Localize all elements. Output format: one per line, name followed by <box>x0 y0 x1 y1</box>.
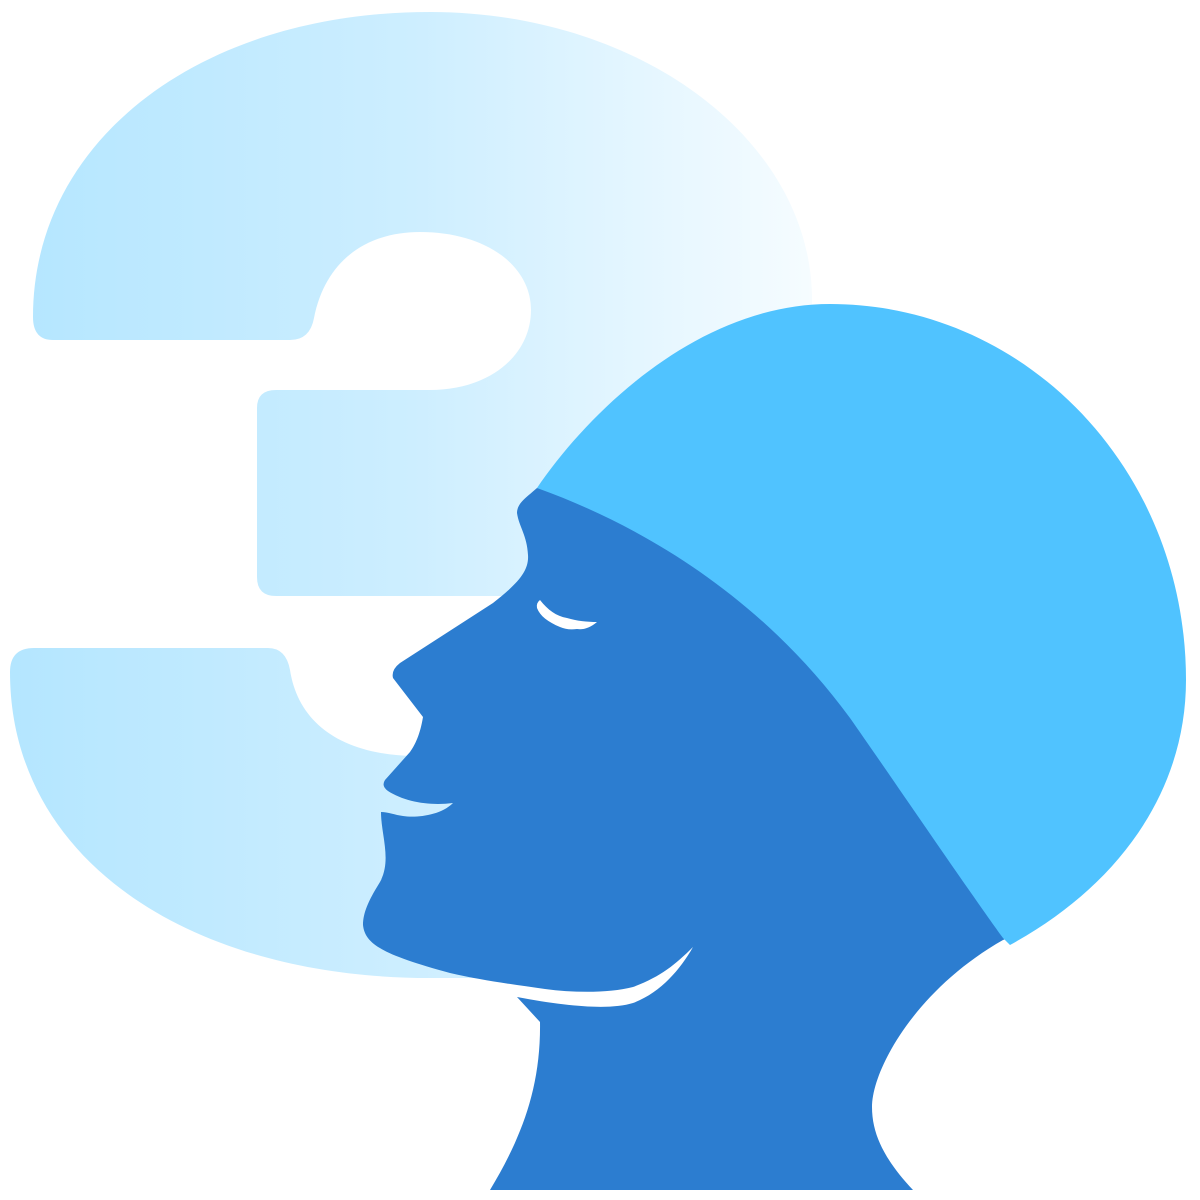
swim cap <box>537 304 1186 945</box>
head silhouette <box>363 488 1030 1190</box>
eye <box>537 600 597 629</box>
large number 3 <box>10 12 812 978</box>
